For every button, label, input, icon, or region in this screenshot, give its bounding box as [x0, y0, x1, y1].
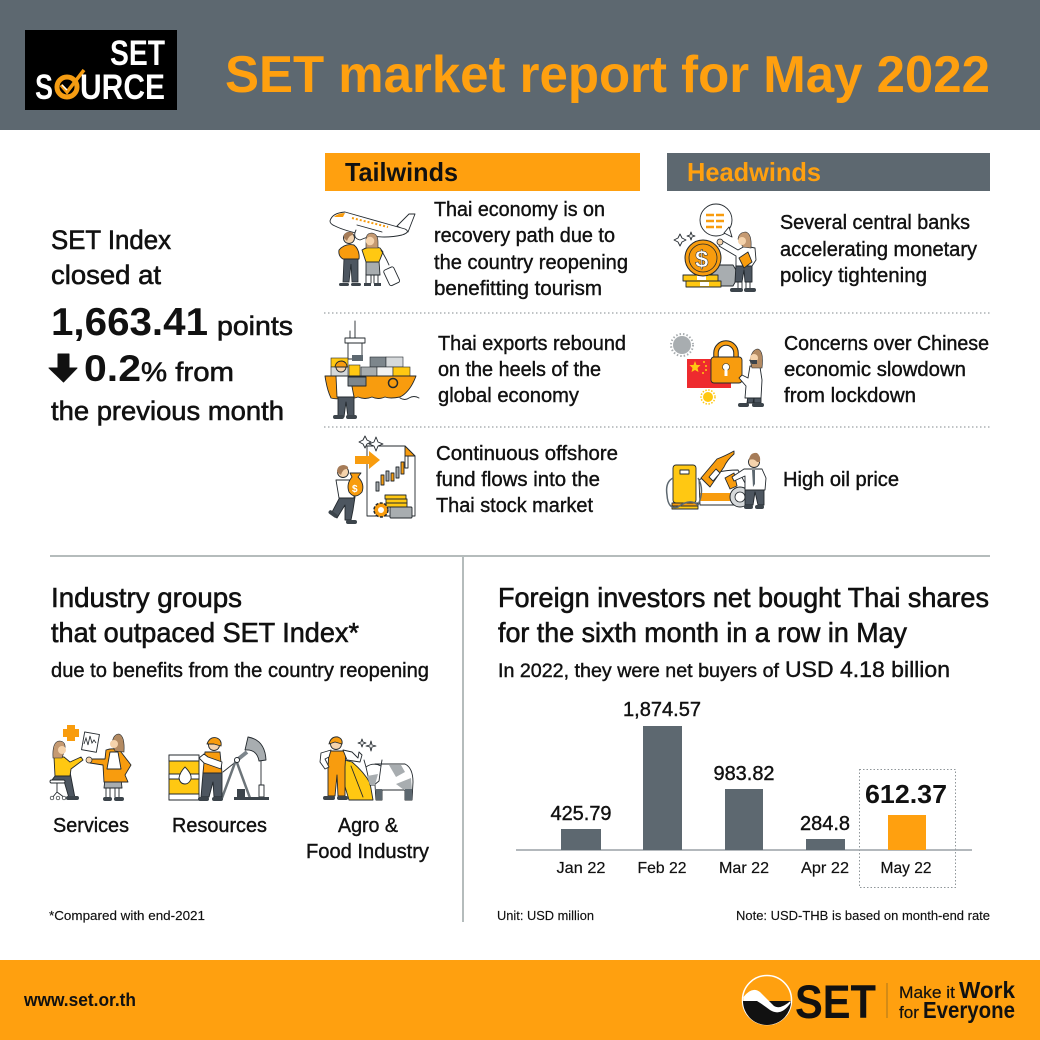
text: headwind 2: from lockdown	[784, 384, 916, 407]
icon: agro and food	[320, 737, 413, 800]
text: tailwind 2: global economy	[438, 384, 580, 407]
text: tailwind 2: on the heels of the	[438, 358, 601, 381]
bar: May 22: 612.37	[865, 779, 947, 809]
bar: Feb 22: Feb 22	[638, 860, 687, 877]
panel: SET Index summary: % from	[141, 357, 234, 387]
icon: oil pump and car	[667, 451, 766, 509]
SET logo	[742, 975, 876, 1028]
headwinds heading	[667, 153, 990, 191]
text: tailwind 3: Continuous offshore	[436, 442, 618, 465]
bar: Mar 22	[714, 763, 774, 877]
industry heading: that outpaced SET Index*	[51, 617, 359, 648]
icon: China lockdown	[671, 334, 764, 407]
tagline: Everyone	[923, 997, 1015, 1023]
icon: plane and tourists	[330, 212, 415, 286]
exchange rate note: Note: USD-THB is based on month-end rate	[736, 908, 990, 923]
foreign investors heading: for the sixth month in a row in May	[498, 617, 907, 648]
panel: headwinds	[667, 153, 990, 509]
label: resources: Resources	[172, 815, 267, 837]
logo: SET Source: URCE	[80, 68, 165, 107]
panel: foreign investors	[497, 582, 990, 923]
text: tailwind 1: recovery path due to	[434, 224, 615, 247]
panel: tailwinds	[325, 153, 640, 524]
bar: Apr 22: 284.8	[800, 813, 850, 835]
bar: Apr 22	[800, 813, 850, 877]
title: SET market report for May 2022	[225, 46, 990, 104]
icon: cargo ship	[325, 321, 419, 419]
foreign investors heading: Foreign investors net bought Thai shares	[498, 582, 989, 613]
highlight box	[860, 770, 956, 888]
text: headwind 2: economic slowdown	[784, 358, 966, 381]
text: headwind 3: High oil price	[783, 468, 899, 491]
tagline	[899, 977, 1015, 1023]
icon: services	[50, 725, 131, 801]
SET logo: SET	[795, 975, 876, 1028]
text: tailwind 3: Thai stock market	[436, 494, 593, 517]
bar chart	[516, 699, 972, 888]
text: tailwind 1: the country reopening	[434, 251, 628, 274]
icon: fund flows chart: $	[352, 484, 358, 495]
icon: fund flows chart	[328, 436, 415, 524]
foreign investors heading: In 2022, they were net buyers of	[498, 660, 780, 682]
label: agro and food industry: Food Industry	[306, 841, 429, 863]
text: tailwind 2: Thai exports rebound	[438, 332, 626, 355]
text: tailwind 3	[436, 442, 618, 517]
icon: down arrow	[49, 354, 77, 382]
text: tailwind 2	[438, 332, 626, 407]
panel: SET Index summary	[49, 225, 293, 426]
tailwinds heading	[325, 153, 640, 191]
bar: May 22	[865, 779, 947, 877]
bar: Mar 22: Mar 22	[719, 860, 769, 877]
footnote: *Compared with end-2021	[49, 908, 205, 923]
panel: SET Index summary: 0.2	[84, 348, 141, 389]
headwinds heading: Headwinds	[687, 157, 821, 187]
icon: resources	[169, 737, 269, 801]
industry heading	[51, 582, 429, 682]
footer band	[0, 960, 1040, 1040]
header band	[0, 0, 1040, 130]
icon: monetary tightening: $	[695, 246, 709, 273]
text: tailwind 1	[434, 198, 628, 300]
panel: SET Index summary: SET Index	[51, 225, 171, 255]
bar: Jan 22: Jan 22	[556, 860, 606, 877]
bar: Jan 22	[550, 803, 612, 877]
panel: industry groups	[49, 582, 429, 923]
industry heading: due to benefits from the country reopening	[51, 660, 429, 682]
website: www.set.or.th	[23, 990, 136, 1010]
panel: SET Index summary: the previous month	[51, 396, 284, 426]
label: agro and food industry: Agro &	[338, 815, 399, 837]
foreign investors heading: USD 4.18 billion	[785, 657, 950, 682]
bar: May 22: May 22	[880, 860, 932, 877]
text: tailwind 1: benefitting tourism	[434, 277, 602, 300]
text: tailwind 3: fund flows into the	[436, 468, 600, 491]
icon: monetary tightening	[674, 204, 756, 292]
tagline: Work	[959, 977, 1015, 1003]
text: headwind 1: Several central banks	[780, 211, 970, 234]
tailwinds heading: Tailwinds	[345, 157, 458, 187]
label: services: Services	[53, 815, 129, 837]
logo: SET Source	[25, 30, 177, 110]
text: headwind 2: Concerns over Chinese	[784, 332, 989, 355]
text: headwind 2	[784, 332, 989, 407]
industry heading: Industry groups	[51, 582, 242, 613]
bar: Jan 22: 425.79	[550, 803, 612, 825]
panel: SET Index summary: closed at	[51, 260, 162, 290]
panel: SET Index summary: 1,663.41	[51, 301, 208, 344]
bar: Mar 22: 983.82	[714, 763, 774, 785]
text: headwind 1: policy tightening	[780, 264, 927, 287]
bar: Feb 22: 1,874.57	[623, 699, 701, 721]
bar: Apr 22: Apr 22	[801, 860, 849, 877]
logo: SET Source: SET	[110, 34, 165, 73]
unit note: Unit: USD million	[497, 908, 594, 923]
bar: Feb 22	[623, 699, 701, 877]
panel: SET Index summary: points	[217, 311, 293, 341]
text: headwind 1	[780, 211, 978, 287]
logo: SET Source: S	[35, 68, 53, 107]
text: headwind 1: accelerating monetary	[780, 238, 978, 261]
tagline: for	[899, 1003, 919, 1022]
label: agro and food industry	[306, 815, 429, 863]
foreign investors heading	[498, 582, 989, 682]
text: tailwind 1: Thai economy is on	[434, 198, 605, 221]
tagline: Make it	[899, 983, 955, 1002]
